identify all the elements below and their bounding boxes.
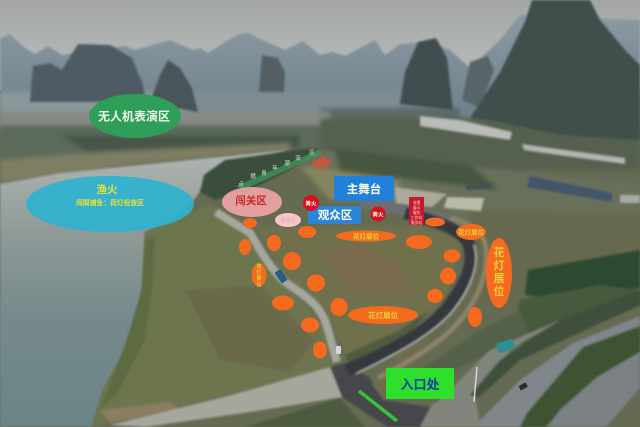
valley: village, fields, river bank [0, 90, 640, 310]
red sign board: 展示 [413, 205, 420, 210]
buildings, trees, and fields [200, 116, 640, 372]
bonfire marker left: 篝火 [305, 200, 317, 208]
pass zone: 闯关区 [235, 194, 267, 207]
pass zone [222, 187, 282, 217]
lantern booth label: top centre: 花灯展位 [353, 232, 380, 240]
fishing fire zone [26, 176, 194, 232]
red sign board: 服务 [413, 210, 420, 215]
red sign board [409, 197, 424, 225]
pink small ellipse: 表演区 [280, 217, 296, 224]
green strip label: 青 [261, 169, 267, 177]
audience zone: 观众区 [318, 209, 353, 222]
main stage: 主舞台 [347, 182, 381, 196]
green strip label: 区 [309, 149, 315, 156]
lantern booth label: right tall: 展 [494, 272, 504, 285]
meadows [92, 205, 462, 427]
lantern booth label: right small: 花灯展位 [458, 228, 484, 236]
fishing fire zone: 渔火 [96, 183, 118, 196]
red sign board: 非遗 [413, 200, 420, 205]
lantern booth label: right tall: 位 [494, 284, 504, 298]
lantern booth label: left vertical [252, 263, 266, 288]
drone show zone [89, 94, 181, 138]
lantern booth label: bottom centre: 花灯展位 [368, 310, 398, 320]
near karst peaks [30, 0, 640, 140]
vehicles and details [275, 269, 288, 284]
green strip label: 燃 [250, 172, 256, 180]
bonfire marker right [370, 206, 386, 222]
lantern booth label: top centre [336, 230, 396, 242]
fishing fire zone: 闯關捕鱼：荷灯投放区 [76, 198, 144, 207]
road network [110, 290, 640, 427]
red sign board: 服务站 [411, 220, 422, 225]
lantern booth label: left vertical: 位 [256, 281, 262, 288]
lantern booths: orange markers [239, 218, 482, 358]
pink small ellipse [275, 213, 301, 227]
bonfire marker right: 篝火 [372, 210, 384, 218]
red sign board: 工作站 [411, 215, 422, 220]
green strip label: 点 [238, 181, 244, 188]
lantern booth label: left vertical: 灯 [256, 269, 262, 276]
river [0, 150, 288, 427]
bonfire marker left [303, 195, 319, 211]
drone show zone: 无人机表演区 [98, 108, 170, 124]
green strip label [236, 149, 322, 190]
entrance sign [386, 368, 454, 399]
lantern booth label: right small [456, 224, 486, 240]
green strip label: 流 [295, 154, 301, 162]
main stage [334, 176, 394, 201]
far mountains [0, 15, 640, 130]
audience zone [308, 206, 361, 224]
lantern booth label: right tall [486, 238, 512, 308]
lantern booth label: left vertical: 花 [256, 263, 262, 270]
lantern booth label: left vertical: 展 [256, 276, 262, 282]
green strip label: 潮 [284, 159, 290, 167]
lantern booth label: bottom centre [348, 306, 418, 324]
entrance sign: 入口处 [400, 377, 440, 392]
lantern booth label: right tall: 灯 [494, 259, 504, 272]
green strip label: 年 [272, 164, 278, 172]
lantern booth label: right tall: 花 [494, 245, 504, 259]
